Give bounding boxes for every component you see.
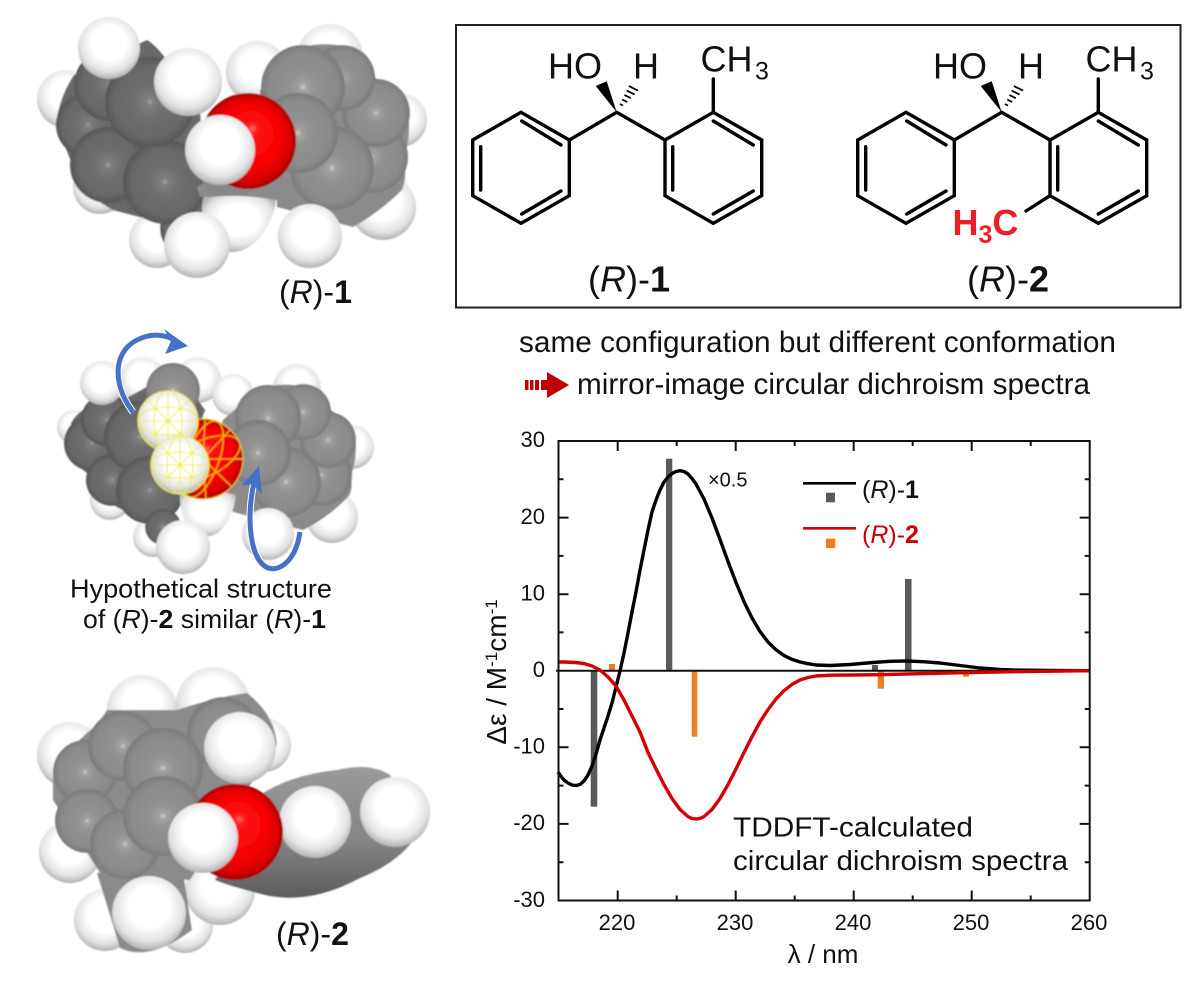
hydroxyl hydrogen [168,803,238,873]
y axis title: cm [481,614,512,652]
panel: space-filling model of (R)-2 [37,667,430,953]
rotatory strength bars: gray [591,459,912,807]
caption: hypothetical structure: of (R)-2 similar (R)-1 [83,604,326,634]
x axis tick labels: 260 [1071,910,1107,935]
chart: TDDFT circular dichroism spectra [481,427,1107,969]
structural formula: (R)-1 [473,39,769,223]
y axis tick labels: 20 [521,504,545,529]
chart annotation: circular dichroism spectra [733,845,1068,876]
curve: (R)-2 red [558,662,1090,819]
caption: hypothetical structure: Hypothetical structure [70,574,332,604]
back hydrogens [37,667,291,953]
legend: (R)-2 [862,521,919,549]
x axis tick labels: 220 [599,910,635,935]
back hydrogens [57,357,374,557]
carbon atoms [64,363,200,545]
y axis tick labels: 30 [521,427,545,452]
y axis title: -1 [482,599,501,614]
x axis title: λ / nm [788,939,858,969]
y axis title: Δε / M [481,667,512,745]
label: (R)-1 formula: (R)-1 [588,258,670,300]
y axis tick labels: -10 [513,734,545,758]
legend [803,476,919,549]
carbon underlay: tolyl ring [53,693,277,880]
carbon underlay: methyl group [97,873,192,952]
zero line [556,670,1090,672]
x axis tick labels: 250 [953,910,989,935]
carbon underlay: phenyl ring [197,44,409,227]
upper-left hydrogen [80,361,124,405]
plot frame and ticks [558,441,1090,900]
carbon underlay: tolyl ring [71,385,205,515]
carbon underlay: tolyl ring [56,40,207,225]
curve: (R)-1 black [558,471,1090,786]
y axis tick labels: 0 [533,657,545,682]
upper-left hydrogen [78,17,140,79]
x axis tick labels: 230 [717,910,753,935]
y axis title: -1 [482,652,501,667]
oxygen atom [200,93,296,189]
front hydrogens [154,48,342,278]
label: (R)-2 model: (R)-2 [276,916,349,952]
arrow: red dashed [525,372,569,398]
chart annotation [733,812,1068,876]
front hydrogens [112,712,430,950]
arrow: upper blue rotation [118,329,188,412]
structural formula: (R)-2 [858,39,1154,249]
back hydrogens [37,24,427,268]
caption: hypothetical structure [70,574,332,634]
rotatory strength bars: orange [609,664,969,737]
panel: space-filling model of (R)-1 [37,17,427,278]
y axis tick labels: -30 [513,887,545,912]
hydroxyl hydrogen [185,115,255,185]
scale note: ×0.5 [708,470,747,492]
carbon atoms [56,49,220,258]
front hydrogens [156,490,294,574]
carbon atoms: tolyl ring [53,697,259,879]
wireframe hydroxyl hydrogen [151,436,209,494]
label: (R)-1 model: (R)-1 [279,274,352,310]
panel: hypothetical structure model [57,357,374,574]
wireframe upper hydrogen [138,391,198,451]
carbon underlay: phenyl ring [197,385,356,530]
legend: (R)-1 [862,476,919,504]
carbon atoms: phenyl ring [225,384,356,517]
arrow: lower blue rotation [241,466,300,569]
oxygen atom [187,784,283,880]
structural formula: (R)-2: C [992,202,1018,243]
label: (R)-2 formula: (R)-2 [967,258,1049,300]
y axis tick labels [513,427,545,912]
chart annotation: TDDFT-calculated [733,812,973,843]
structural formula: (R)-2: H [952,202,978,243]
y axis tick labels: -20 [513,810,545,835]
carbon atoms: phenyl ring [200,45,410,210]
carbon underlay: phenyl ring seen edge-on [215,767,417,898]
wireframe oxygen [159,416,247,502]
panel: structural formulas box [456,25,1180,308]
text: mirror-image statement: mirror-image circular dichroism spectra [577,368,1091,401]
y axis tick labels: 10 [521,580,545,606]
x axis tick labels: 240 [835,910,871,935]
text: same configuration statement: same configuration but different conformation [519,326,1116,359]
structural formula: (R)-2: 3 [978,221,992,249]
x axis tick labels [599,910,1107,935]
